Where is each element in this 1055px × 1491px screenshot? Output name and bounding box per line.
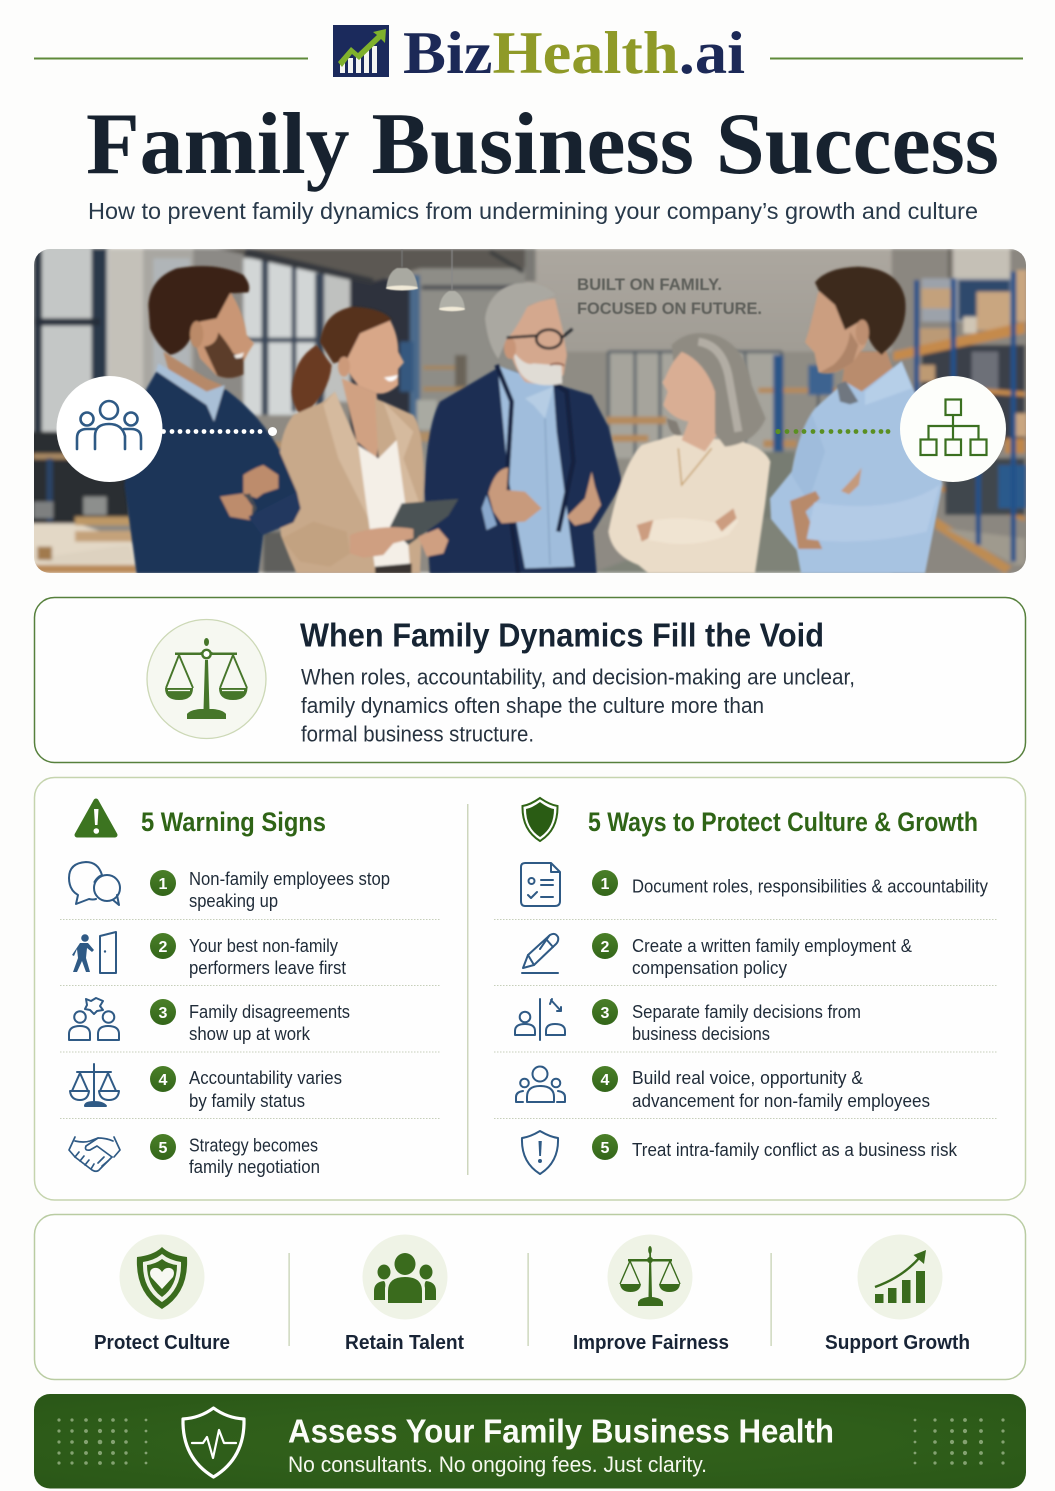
label: Improve Fairness	[573, 1332, 729, 1354]
icon: warning triangle	[77, 801, 115, 835]
row 5: strategy becomes negotiation	[69, 1134, 320, 1177]
wall slogan text: FOCUSED ON FUTURE.	[577, 299, 762, 318]
wall slogan text	[578, 278, 762, 314]
logo wordmark: BizHealth.ai	[403, 20, 745, 86]
row 4: voice for non-family employees	[516, 1066, 930, 1111]
icon: logo mark	[333, 25, 389, 77]
row 2: best performers leave	[72, 932, 346, 978]
person: woman in beige blazer	[279, 307, 458, 573]
text: business decisions	[632, 1024, 770, 1044]
person: man in navy sweater, left	[124, 266, 301, 573]
person: older man in navy blazer, centre	[424, 283, 622, 573]
row 1: employees stop speaking up	[69, 862, 390, 905]
number badge: 3	[159, 1005, 168, 1022]
photo panel: family business team in warehouse	[30, 245, 1032, 575]
icon: speech bubbles	[69, 862, 120, 905]
label: Protect Culture	[94, 1332, 230, 1354]
wall slogan text: BUILT ON FAMILY.	[577, 275, 722, 294]
number badge: 2	[601, 939, 610, 956]
icon: people	[374, 1253, 436, 1303]
header rule right	[770, 58, 1023, 60]
icon: growth chart	[875, 1250, 926, 1303]
text: performers leave first	[189, 958, 346, 978]
text: by family status	[189, 1091, 305, 1111]
number badge	[150, 999, 176, 1025]
icon: pen	[522, 934, 558, 973]
icon: scales	[70, 1064, 119, 1106]
text	[632, 936, 912, 978]
icon: people group	[516, 1066, 565, 1102]
number badge	[592, 1066, 618, 1092]
icon: balance scales in circle	[147, 620, 266, 738]
body text: family dynamics often shape the culture more than	[301, 693, 764, 718]
number badge	[592, 870, 618, 896]
text: family negotiation	[189, 1157, 320, 1177]
text: Family disagreements	[189, 1002, 350, 1022]
text: Accountability varies	[189, 1068, 342, 1088]
icon: person leaving through door	[72, 932, 116, 973]
body text	[301, 664, 855, 746]
number badge	[592, 999, 618, 1025]
people	[124, 266, 942, 573]
number badge	[150, 1134, 176, 1160]
panel: when family dynamics fill the void	[34, 598, 1026, 762]
decorative dot grid left	[57, 1418, 147, 1465]
subtitle: How to prevent family dynamics from undermining your company’s growth and culture	[88, 198, 978, 224]
outcome: retain talent	[345, 1234, 464, 1354]
label: Support Growth	[825, 1332, 970, 1354]
person: older woman in cream sweater	[608, 333, 770, 573]
icon: shield with heartbeat	[183, 1408, 244, 1477]
text	[189, 936, 346, 978]
person: man in blue shirt, right	[770, 267, 942, 573]
photo background	[30, 245, 1032, 575]
number badge: 4	[159, 1072, 168, 1089]
number badge	[150, 870, 176, 896]
row 2: employment policy	[522, 933, 912, 978]
text: Document roles, responsibilities & accountability	[632, 876, 988, 896]
photo callout: family connector dots	[161, 427, 277, 436]
text: show up at work	[189, 1024, 311, 1044]
text: Build real voice, opportunity &	[632, 1068, 863, 1088]
outcome: protect culture	[94, 1234, 230, 1354]
cta heading: Assess Your Family Business Health	[288, 1412, 834, 1450]
panel: warning signs and protective steps	[34, 778, 1026, 1200]
icon: two people with conflict	[69, 998, 119, 1040]
pendant lamps	[386, 249, 465, 311]
text	[632, 1002, 861, 1044]
icon: family circle badge	[56, 376, 162, 482]
icon: org chart circle badge	[900, 376, 1006, 482]
icon: handshake	[69, 1137, 120, 1171]
column: 5 warning signs	[60, 801, 441, 1177]
icon: shield	[522, 798, 558, 841]
number badge: 1	[601, 876, 610, 893]
header rule left	[34, 58, 308, 60]
row 3: disagreements at work	[69, 998, 350, 1044]
call to action banner	[34, 1394, 1026, 1488]
panel: outcomes	[34, 1214, 1026, 1380]
text: Non-family employees stop	[189, 869, 390, 889]
icon: separated family and business	[515, 999, 565, 1040]
text: advancement for non-family employees	[632, 1091, 930, 1111]
label: Retain Talent	[345, 1332, 464, 1354]
text: Treat intra-family conflict as a business risk	[632, 1140, 958, 1160]
photo callout: structure connector dots	[775, 429, 890, 434]
number badge: 3	[601, 1005, 610, 1022]
body text: formal business structure.	[301, 722, 534, 746]
row 1: document roles	[521, 863, 988, 906]
icon: scales	[620, 1246, 680, 1306]
logo	[333, 20, 745, 86]
text	[189, 1136, 320, 1177]
text: Your best non-family	[189, 936, 338, 956]
number badge: 1	[159, 876, 168, 893]
number badge: 2	[159, 939, 168, 956]
number badge	[150, 933, 176, 959]
icon: checklist document	[521, 863, 560, 906]
row 1 second line: speaking up	[189, 891, 278, 911]
number badge: 5	[601, 1140, 610, 1157]
text	[632, 1068, 930, 1111]
text: Strategy becomes	[189, 1136, 318, 1156]
text: Create a written family employment &	[632, 936, 912, 956]
heading: ways to protect: 5 Ways to Protect Culture & Growth	[588, 807, 978, 837]
icon: alert shield	[522, 1131, 558, 1174]
text	[189, 1068, 342, 1111]
number badge: 5	[159, 1140, 168, 1157]
text	[189, 1002, 350, 1044]
cta subheading: No consultants. No ongoing fees. Just clarity.	[288, 1452, 707, 1477]
number badge	[592, 933, 618, 959]
outcome: improve fairness	[573, 1234, 729, 1354]
column: 5 ways to protect	[494, 798, 998, 1174]
heading: warning signs: 5 Warning Signs	[141, 807, 326, 837]
row 5: conflict as business risk	[522, 1131, 958, 1174]
title: Family Business Success	[86, 96, 999, 193]
body text: When roles, accountability, and decision-making are unclear,	[301, 664, 855, 690]
number badge: 4	[601, 1072, 610, 1089]
number badge	[150, 1066, 176, 1092]
row 4: accountability varies	[70, 1064, 342, 1111]
heading: When Family Dynamics Fill the Void	[300, 616, 824, 654]
row 3: separate decisions	[515, 999, 861, 1044]
outcome: support growth	[825, 1234, 970, 1354]
text: Separate family decisions from	[632, 1002, 861, 1022]
decorative dot grid right	[914, 1418, 1005, 1465]
icon: shield with heart	[137, 1247, 187, 1309]
text: compensation policy	[632, 958, 787, 978]
number badge	[592, 1134, 618, 1160]
